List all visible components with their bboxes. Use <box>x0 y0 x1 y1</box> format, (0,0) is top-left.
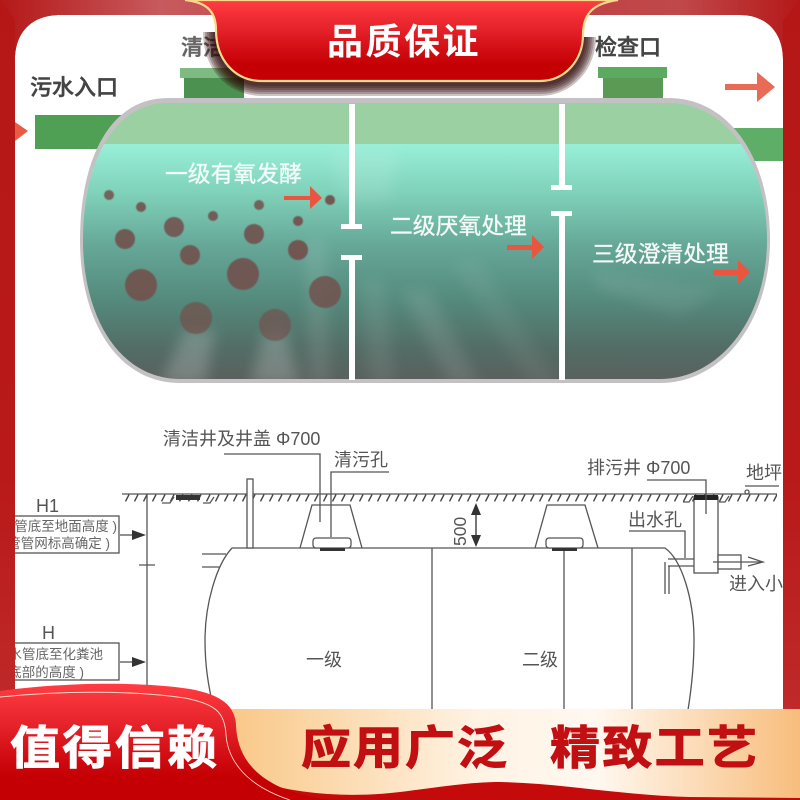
label: cleaning port: 清洁口 <box>181 35 247 60</box>
banner slogan one: 应用广泛 <box>301 724 507 775</box>
H1 description: 管底至地面高度 ) <box>14 518 117 534</box>
H description <box>8 647 103 680</box>
H description: 水管底至化粪池 <box>8 647 103 662</box>
header title: 品质保证 <box>327 21 481 62</box>
septic tank cutaway <box>80 98 770 385</box>
stage three label: 三级澄清处理 <box>592 241 729 267</box>
H1 description: 管管网标高确定 ) <box>7 535 110 551</box>
cleaning well one <box>300 505 362 551</box>
leader lines <box>224 454 779 558</box>
well and cover label: 清洁井及井盖 Φ700 <box>163 429 320 449</box>
tank interior <box>80 100 770 385</box>
vent pipe <box>247 479 253 548</box>
H box <box>0 643 119 680</box>
discharge well label: 排污井 Φ700 <box>587 458 690 478</box>
ground level label: 地坪 <box>746 463 782 483</box>
engineering cross-section drawing <box>0 454 779 710</box>
inspection port riser <box>598 67 667 100</box>
outlet hole label: 出水孔 <box>628 510 682 530</box>
badge inner outline <box>0 692 290 800</box>
stage one label: 一级有氧发酵 <box>165 161 302 187</box>
stage two label: 二级厌氧处理 <box>390 213 527 239</box>
outlet pipe <box>700 128 783 161</box>
ground marker <box>745 490 749 494</box>
H1 description <box>15 519 116 551</box>
flow arrow one <box>284 186 322 209</box>
H arrow <box>120 657 146 667</box>
label: inspection port: 检查口 <box>595 35 661 60</box>
outlet piping <box>665 555 763 594</box>
dimension arrow 500 <box>471 503 481 547</box>
top frame highlight <box>0 0 800 60</box>
stage one drawing label: 一级 <box>306 650 342 670</box>
inlet arrow <box>15 122 28 141</box>
tank outline <box>202 548 694 710</box>
H1 arrow <box>120 530 146 540</box>
H description: 底部的高度 ) <box>8 664 84 680</box>
header shadow <box>216 32 583 83</box>
label: sewage inlet: 污水入口 <box>30 75 118 100</box>
chamber dividers <box>432 548 632 710</box>
stage two drawing label: 二级 <box>522 650 558 670</box>
bottom red wave <box>250 780 800 800</box>
discharge destination label: 进入小 <box>729 574 783 594</box>
flow arrow three <box>713 260 750 284</box>
H heading: H <box>42 623 55 643</box>
aerobic chamber bubbles <box>104 190 341 341</box>
H1 box <box>0 516 119 553</box>
discharge well <box>683 495 729 573</box>
cleaning hole label: 清污孔 <box>334 450 388 470</box>
depth value 500: 500 <box>450 517 470 546</box>
drawing labels <box>7 429 783 680</box>
baffle wall two <box>551 104 572 380</box>
badge text: 值得信赖 <box>10 724 217 775</box>
baffle wall one <box>341 104 362 380</box>
banner slogan two: 精致工艺 <box>550 724 757 775</box>
ground line and hatching <box>122 494 777 502</box>
bottom cream banner <box>220 709 800 800</box>
header ribbon <box>185 0 618 81</box>
left red badge <box>0 684 340 800</box>
inlet pipe <box>35 115 145 149</box>
level dimension line <box>139 494 155 700</box>
cleaning port riser <box>180 68 244 100</box>
cleaning well two <box>535 505 598 551</box>
flow arrow two <box>507 235 544 259</box>
outlet arrow <box>725 72 775 102</box>
ground fitting <box>162 495 214 503</box>
H1 heading: H1 <box>36 496 59 516</box>
